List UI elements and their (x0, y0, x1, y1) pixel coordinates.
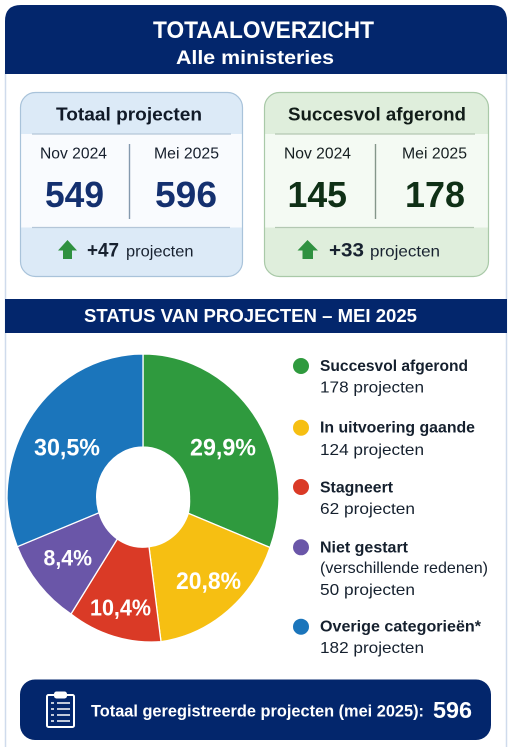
legend item: niet gestart: Niet gestart (320, 540, 409, 557)
section heading: STATUS VAN PROJECTEN – MEI 2025 (84, 305, 417, 326)
panel: totaal projecten (20, 92, 242, 276)
donut chart (7, 354, 279, 642)
legend item: in uitvoering gaande: In uitvoering gaande (320, 420, 475, 437)
percentage labels: 10,4% (90, 594, 151, 620)
legend item: stagneert: 62 projecten (320, 501, 415, 518)
percentage labels: 8,4% (44, 546, 92, 570)
panel: totaal projecten: 549 (45, 174, 104, 215)
slice: stagneert (71, 539, 161, 642)
title header: Alle ministeries (176, 47, 334, 69)
legend item: niet gestart: (verschillende redenen) (320, 560, 488, 577)
panel: totaal projecten: Mei 2025 (154, 146, 219, 162)
footer total bar: Totaal geregistreerde projecten (mei 2025): (91, 702, 424, 720)
title header: TOTAALOVERZICHT (153, 17, 374, 44)
legend item: overige categorieën: Overige categorieën* (320, 619, 482, 636)
legend (293, 358, 488, 657)
icon: up arrow (298, 240, 318, 259)
legend item: succesvol afgerond: Succesvol afgerond (320, 358, 468, 375)
panel: succesvol afgerond (264, 92, 488, 276)
footer total bar (20, 680, 491, 740)
legend item: niet gestart: 50 projecten (320, 582, 415, 599)
legend item: in uitvoering gaande (293, 420, 475, 459)
percentage labels: 29,9% (190, 434, 256, 462)
title header (5, 5, 507, 74)
panel: succesvol afgerond: Succesvol afgerond (288, 104, 466, 124)
panel: totaal projecten: Nov 2024 (40, 146, 107, 162)
icon: up arrow (58, 240, 77, 259)
percentage labels: 20,8% (176, 568, 241, 595)
panel: totaal projecten: +47 (87, 240, 119, 262)
section heading (5, 299, 507, 333)
panel: succesvol afgerond: Nov 2024 (284, 146, 351, 162)
legend item: stagneert: Stagneert (320, 480, 394, 497)
slice: overige categorieën (7, 354, 143, 547)
slice: in uitvoering gaande (149, 513, 270, 642)
legend item: overige categorieën (293, 619, 482, 657)
slice: succesvol afgerond (143, 354, 279, 548)
legend item: succesvol afgerond (293, 358, 468, 397)
legend item: niet gestart (293, 539, 488, 599)
legend item: stagneert (293, 479, 415, 518)
legend item: overige categorieën: 182 projecten (320, 640, 424, 657)
panel: succesvol afgerond: +33 (329, 240, 364, 262)
legend item: succesvol afgerond: 178 projecten (320, 380, 424, 397)
panel: totaal projecten: 596 (155, 174, 217, 215)
footer total bar: 596 (433, 697, 472, 723)
icon: clipboard (47, 692, 74, 727)
percentage labels: 30,5% (34, 434, 100, 462)
panel: totaal projecten: projecten (126, 244, 194, 260)
percentage labels (34, 434, 256, 620)
panel: succesvol afgerond: 145 (288, 174, 347, 215)
panel: succesvol afgerond: Mei 2025 (402, 146, 467, 162)
slice: niet gestart (17, 513, 117, 614)
legend item: in uitvoering gaande: 124 projecten (320, 442, 424, 459)
panel: succesvol afgerond: 178 (405, 174, 465, 215)
panel: totaal projecten: Totaal projecten (56, 104, 202, 124)
panel: succesvol afgerond: projecten (370, 244, 440, 260)
